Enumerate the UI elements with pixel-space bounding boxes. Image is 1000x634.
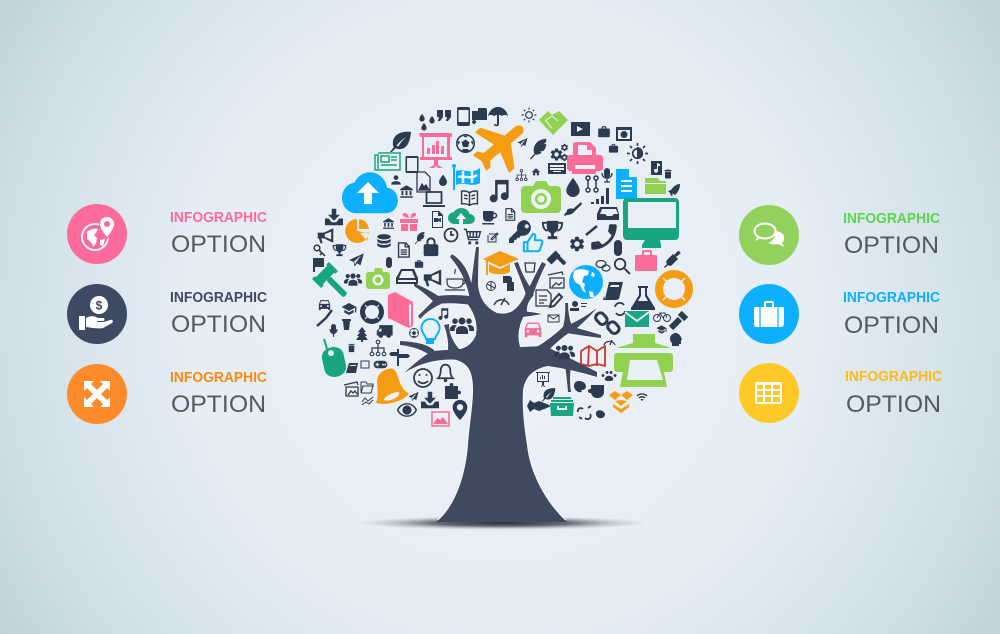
circle icon: chat bubbles bbox=[739, 205, 799, 265]
icon: note bbox=[438, 308, 448, 320]
icon: rocket bbox=[668, 184, 680, 196]
right option 3 bbox=[739, 363, 943, 423]
circle icon: table bbox=[739, 363, 799, 423]
icon: sun bbox=[522, 108, 536, 122]
heading: INFOGRAPHIC bbox=[170, 210, 268, 226]
icon: pink presentation board bbox=[419, 133, 452, 168]
icon: pink book bbox=[388, 292, 413, 328]
icon: refresh bbox=[615, 303, 625, 315]
icon: clock bbox=[444, 228, 458, 242]
icon: orange dropbox bbox=[609, 391, 633, 413]
icon: bell outline bbox=[438, 365, 453, 382]
icon: database bbox=[377, 234, 391, 248]
icon: coffee cup bbox=[482, 211, 497, 224]
icon: small cap bbox=[656, 325, 667, 334]
circle icon: expand arrows bbox=[67, 364, 127, 424]
icon: museum bbox=[383, 218, 394, 229]
icon: bug bbox=[610, 240, 626, 256]
icon: users bbox=[344, 273, 362, 286]
icon: users tree bbox=[450, 318, 474, 334]
circle icon: suitcase bbox=[739, 284, 799, 344]
icon: pink printer bbox=[567, 142, 603, 174]
icon: puzzle bbox=[445, 383, 461, 399]
icon: head bbox=[670, 333, 682, 346]
icon: leaf bbox=[390, 132, 411, 152]
icon: gavel dark bbox=[549, 253, 565, 264]
icon: small briefcase bbox=[415, 260, 423, 268]
icon: space shuttle bbox=[527, 400, 551, 412]
icon: teal monitor bbox=[623, 198, 679, 248]
icon: paint drum bbox=[596, 408, 607, 418]
icon: blue bulb bbox=[421, 319, 440, 343]
icon: trophy bbox=[333, 244, 346, 256]
icon: edit note bbox=[488, 233, 498, 242]
icon: video document bbox=[432, 211, 443, 228]
icon: small leaf bbox=[542, 388, 555, 401]
icon: blue globe bbox=[569, 265, 603, 299]
heading: INFOGRAPHIC bbox=[843, 290, 941, 306]
icon: microphone bbox=[602, 168, 612, 182]
icon: photo stack bbox=[344, 382, 358, 396]
icon: image document bbox=[417, 172, 430, 192]
ground shadow bbox=[356, 516, 648, 530]
icon: mic bbox=[330, 324, 337, 337]
icon: handset bbox=[591, 224, 617, 250]
icon: inbox download bbox=[421, 392, 439, 408]
icon: tablet bbox=[406, 156, 418, 173]
icon: magnifier bbox=[614, 258, 631, 275]
icon: briefcase bbox=[598, 126, 610, 137]
icon: wifi bbox=[636, 393, 648, 401]
icon: green folder bbox=[645, 178, 666, 194]
icon: drop small bbox=[439, 174, 447, 186]
icon: blue upload cloud bbox=[342, 172, 398, 213]
icon: red map bbox=[581, 346, 605, 366]
label: OPTION bbox=[846, 391, 941, 418]
icon: document bbox=[399, 243, 409, 257]
icon: gears bbox=[551, 144, 568, 161]
icon: green camera bbox=[521, 181, 561, 213]
icon: small tile bbox=[361, 361, 369, 368]
icon: small paper plane bbox=[517, 138, 528, 147]
icon: send small bbox=[408, 392, 419, 401]
icon: signal bars bbox=[591, 188, 609, 204]
icon: laptop bbox=[423, 192, 445, 207]
icon: pink gift bbox=[400, 213, 418, 231]
icon: home bbox=[532, 168, 540, 175]
icon: map pin bbox=[453, 400, 467, 420]
icon: smartphone bbox=[457, 107, 470, 126]
heading: INFOGRAPHIC bbox=[170, 290, 268, 306]
icon: music notes bbox=[490, 180, 509, 202]
icon: notebook bbox=[603, 282, 623, 300]
label: OPTION bbox=[171, 311, 266, 338]
icon: teal newspaper bbox=[375, 153, 400, 170]
label: OPTION bbox=[844, 312, 939, 339]
icon: small soccer bbox=[486, 282, 496, 290]
heading: INFOGRAPHIC bbox=[845, 369, 943, 385]
icon: chat bbox=[596, 260, 610, 271]
icon: paper plane bbox=[349, 253, 364, 267]
icon: download tray bbox=[325, 209, 343, 225]
icon: teal gavel bbox=[312, 262, 354, 304]
icon: feather small bbox=[415, 232, 424, 244]
icon: taxi bbox=[319, 300, 330, 310]
circle icon: hand and coin bbox=[67, 284, 127, 344]
icon: teal envelope bbox=[625, 311, 649, 327]
icon: smiley bbox=[414, 369, 432, 387]
icon: megaphone tree bbox=[424, 270, 441, 286]
icon: orange pie chart bbox=[345, 219, 369, 243]
right option 2 bbox=[739, 284, 941, 344]
icon: small bug bbox=[386, 257, 392, 268]
icon: hard drive bbox=[396, 269, 418, 284]
icon: network small bbox=[516, 169, 527, 181]
icon: soccer ball bbox=[457, 135, 474, 152]
icon: truck bbox=[377, 325, 393, 338]
icon: small envelope bbox=[548, 315, 559, 322]
icon: cap bbox=[342, 303, 356, 315]
icon: quotes bbox=[437, 110, 451, 121]
icon: palette bbox=[574, 381, 586, 392]
icon: paw bbox=[602, 371, 617, 381]
circle icon: hand and coin: $ bbox=[96, 298, 103, 312]
icon: orange lifebuoy bbox=[659, 274, 689, 304]
icon: pink suitcase bbox=[635, 250, 657, 271]
icon: large drop bbox=[566, 178, 580, 197]
icon: shopping cart bbox=[464, 229, 480, 244]
icon: dark lifebuoy bbox=[362, 302, 382, 322]
heading: INFOGRAPHIC bbox=[170, 370, 268, 386]
left option 3 bbox=[67, 364, 268, 424]
icon: trash small bbox=[348, 344, 355, 352]
icon: bucket bbox=[342, 319, 351, 330]
label: OPTION bbox=[171, 231, 266, 258]
icon: padlock bbox=[424, 237, 438, 256]
left option 1 bbox=[67, 204, 268, 264]
left option 2 bbox=[67, 284, 268, 344]
icon: stamp bbox=[570, 301, 587, 311]
icon: key bbox=[509, 220, 531, 243]
icon: green handshake bbox=[539, 111, 568, 135]
icon: connector bbox=[586, 176, 598, 192]
icon: coffee saucer bbox=[445, 269, 465, 290]
icon: flag small bbox=[313, 258, 324, 272]
icon: graduation cap orange bbox=[483, 251, 519, 275]
icon: drops bbox=[419, 114, 435, 130]
tree bbox=[400, 247, 601, 522]
icon: gear bbox=[570, 237, 584, 251]
icon: blue document bbox=[616, 169, 637, 199]
icon: green printer bbox=[614, 334, 673, 387]
icon: open book bbox=[462, 191, 477, 205]
icon: pink car bbox=[525, 323, 541, 337]
label: OPTION bbox=[171, 391, 266, 418]
icon: gamepad bbox=[374, 361, 387, 368]
icon cloud bbox=[312, 107, 689, 426]
icon: magic wand bbox=[586, 226, 597, 235]
icon: flask bbox=[631, 286, 655, 310]
icon: small case bbox=[609, 144, 618, 153]
icon: presentation small bbox=[536, 372, 550, 387]
heading: INFOGRAPHIC bbox=[843, 211, 941, 227]
icon: plug bbox=[664, 251, 681, 268]
icon: pink picture bbox=[432, 412, 449, 426]
icon: copy docs bbox=[503, 276, 514, 291]
icon: feather bbox=[530, 139, 546, 159]
icon: ambulance bbox=[472, 108, 487, 124]
icon: eye bbox=[397, 403, 417, 417]
icon: teal mouse bbox=[320, 339, 348, 379]
icon: keyboard bbox=[548, 163, 566, 174]
icon: tree network bbox=[370, 340, 386, 356]
icon: flashlight bbox=[671, 314, 685, 328]
icon: blue flag bbox=[452, 164, 480, 190]
icon: signpost bbox=[389, 349, 410, 366]
icon: key outline bbox=[314, 245, 325, 256]
icon: megaphone bbox=[318, 228, 333, 243]
label: OPTION bbox=[844, 232, 939, 259]
icon: bank bbox=[400, 185, 413, 198]
icon: pen bbox=[317, 310, 332, 326]
icon: teal archive box bbox=[550, 397, 574, 416]
icon: bicycle bbox=[654, 313, 670, 322]
icon: half sun bbox=[627, 143, 648, 164]
icon: gauge bbox=[604, 340, 615, 345]
icon: film strip bbox=[571, 122, 590, 136]
icon: cup trophy bbox=[543, 221, 562, 239]
icon: broken link bbox=[578, 406, 591, 419]
icon: mug bbox=[588, 385, 604, 398]
icon: page bbox=[506, 209, 515, 220]
icon: small green camera bbox=[366, 268, 390, 289]
icon: music tile bbox=[651, 161, 662, 175]
icon: pine bbox=[356, 327, 368, 342]
icon: paint brush bbox=[564, 202, 582, 216]
icon: person bbox=[391, 175, 401, 185]
icon: dark notebook bbox=[346, 363, 358, 373]
icon: umbrella bbox=[488, 107, 508, 126]
icon: green upload cloud bbox=[448, 208, 475, 224]
icon: line chart bbox=[362, 397, 373, 405]
icon: trash outline bbox=[664, 170, 672, 178]
icon: mini soccer bbox=[409, 328, 419, 338]
icon: picture stack bbox=[548, 272, 564, 288]
circle icon: globe and pin bbox=[67, 204, 127, 264]
icon: people bbox=[554, 345, 575, 359]
icon: blue thumb bbox=[524, 234, 542, 251]
icon: orange bell bbox=[376, 368, 409, 404]
icon: inbox tray bbox=[597, 207, 619, 220]
icon: edit document bbox=[536, 290, 562, 307]
icon: photo camera outline bbox=[616, 127, 632, 141]
icon: gauge small bbox=[494, 298, 509, 305]
icon: cup in tree bbox=[525, 263, 535, 272]
icon: chain links bbox=[594, 311, 621, 335]
icon: orange airplane bbox=[464, 108, 538, 182]
icon: folder outline bbox=[361, 382, 373, 393]
right option 1 bbox=[739, 205, 941, 265]
